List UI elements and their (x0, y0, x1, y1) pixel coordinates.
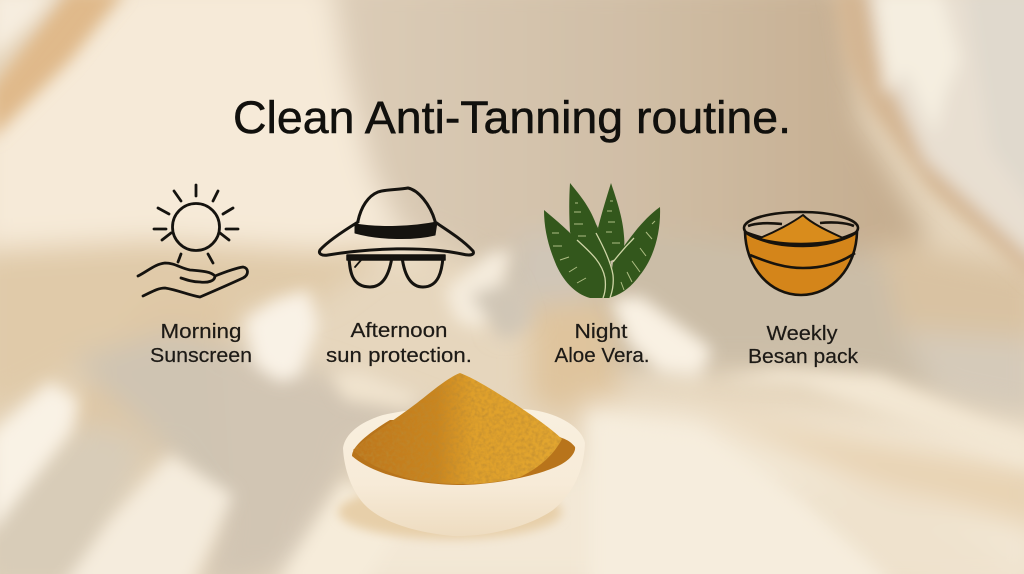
icon: sun hat and glasses (319, 188, 473, 287)
label: Weekly Besan pack: Besan pack (748, 346, 859, 368)
label: Night Aloe Vera: Aloe Vera. (554, 345, 650, 367)
bowl of turmeric powder (338, 373, 585, 539)
label: Morning Sunscreen: Morning (160, 321, 242, 343)
label: Afternoon sun protection: sun protection. (326, 345, 472, 367)
step: morning sunscreen (138, 185, 252, 367)
label: Weekly Besan pack (748, 323, 859, 368)
icon: aloe vera plant (544, 183, 660, 298)
title: Clean Anti-Tanning routine. (233, 92, 791, 143)
step: weekly besan pack (744, 212, 859, 368)
label: Night Aloe Vera: Night (574, 321, 628, 343)
step: afternoon sun protection (319, 188, 473, 367)
label: Weekly Besan pack: Weekly (766, 323, 838, 345)
label: Morning Sunscreen (150, 321, 252, 367)
label: Night Aloe Vera (554, 321, 650, 367)
step: night aloe vera (544, 183, 660, 367)
label: Afternoon sun protection (326, 320, 472, 367)
icon: sun over open hand (138, 185, 248, 297)
label: Afternoon sun protection: Afternoon (350, 320, 448, 342)
label: Morning Sunscreen: Sunscreen (150, 345, 252, 367)
icon: bowl with besan (744, 212, 858, 295)
